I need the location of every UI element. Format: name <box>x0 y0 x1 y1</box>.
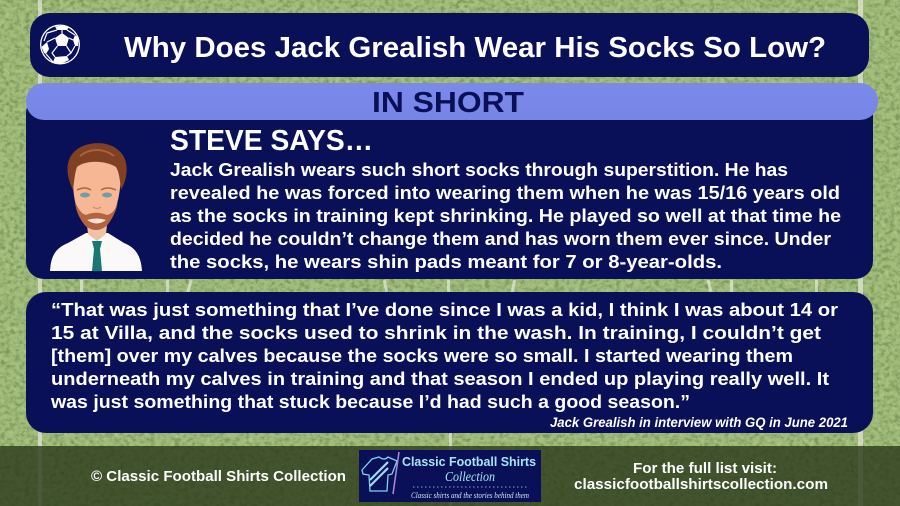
text block: quote: “That was just something that I’ve done since I was a kid, I think I was about 14 or <box>51 299 838 320</box>
in short bar <box>26 83 878 120</box>
logo <box>359 450 541 502</box>
text block: summary: decided he couldn’t change them and has worn them ever since. Under <box>170 228 831 249</box>
text block: summary <box>170 159 841 272</box>
text block: summary: revealed he was forced into wearing them when he was 15/16 years old <box>170 182 840 203</box>
attribution: Jack Grealish in interview with GQ in June 2021 <box>550 415 848 430</box>
heading: in short: IN SHORT <box>372 87 524 119</box>
logo tagline: Classic shirts and the stories behind them <box>411 491 529 500</box>
icon: shirt <box>362 457 397 491</box>
footer link <box>574 461 828 493</box>
logo heading: Classic Football Shirts <box>402 455 536 469</box>
logo script: Collection <box>445 470 495 485</box>
panel: quote <box>26 292 873 433</box>
footer copyright: © Classic Football Shirts Collection <box>91 469 346 485</box>
text block: quote: 15 at Villa, and the socks used to shrink in the wash. In training, I couldn’t get <box>51 322 821 343</box>
portrait illustration <box>50 143 142 271</box>
heading: Steve says: STEVE SAYS… <box>170 125 373 157</box>
text block: summary: the socks, he wears shin pads meant for 7 or 8-year-olds. <box>170 251 722 272</box>
text block: summary: Jack Grealish wears such short socks through superstition. He has <box>170 159 788 180</box>
text block: summary: as the socks in training kept shrinking. He played so well at that time he <box>170 205 841 226</box>
footer band <box>0 446 900 506</box>
text block: quote: underneath my calves in training and that season I ended up playing really well. It <box>51 368 829 389</box>
footer link: For the full list visit: <box>633 461 777 477</box>
text block: quote: [them] over my calves because the socks were so small. I started wearing them <box>51 345 793 366</box>
icon: football <box>40 24 80 64</box>
footer link: classicfootballshirtscollection.com <box>574 477 828 493</box>
panel: Steve says <box>26 83 878 279</box>
text block: quote: was just something that stuck because I’d had such a good season.” <box>50 391 690 412</box>
title banner <box>30 13 869 77</box>
text block: quote <box>50 299 838 412</box>
title text: Why Does Jack Grealish Wear His Socks So Low? <box>124 32 826 64</box>
